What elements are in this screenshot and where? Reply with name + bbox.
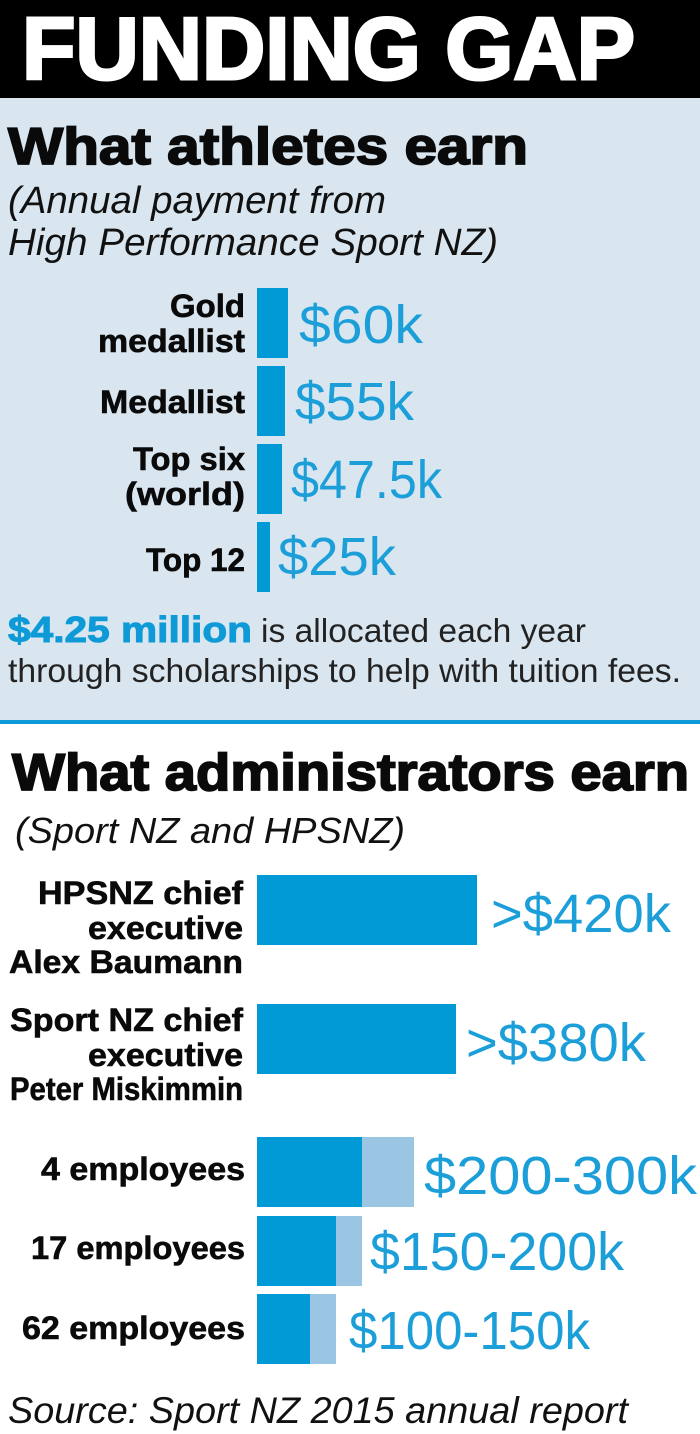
row: HPSNZ chief executive: Alex Baumann [9, 944, 243, 980]
row: top 12: Top 12 [146, 542, 245, 578]
row: 62 employees: 62 employees [22, 1310, 245, 1346]
row: 62 employees [22, 1294, 591, 1364]
row: 4 employees: 4 employees [41, 1151, 245, 1187]
row: 4 employees [41, 1137, 698, 1207]
row: gold medallist: medallist [98, 323, 245, 359]
row: HPSNZ chief executive: executive [88, 910, 243, 946]
bar chart: administrators [9, 875, 698, 1364]
text block: scholarships: $4.25 million [8, 609, 252, 650]
heading: what athletes earn: What athletes earn [8, 118, 528, 176]
row: top six: (world) [125, 476, 245, 512]
row: Sport NZ chief executive: Peter Miskimmin [10, 1071, 243, 1107]
row: gold medallist: $60k [299, 295, 424, 355]
subheading: athletes: (Annual payment from [8, 180, 386, 222]
row: gold medallist: Gold [170, 288, 245, 324]
row: Sport NZ chief executive [10, 1002, 647, 1107]
subheading: administrators: (Sport NZ and HPSNZ) [15, 810, 405, 851]
row: top six: $47.5k [291, 450, 443, 510]
row: 17 employees [31, 1216, 625, 1286]
text block: scholarships: through scholarships to help with tuition fees. [8, 653, 681, 690]
row: top six [125, 441, 443, 514]
bar chart: athletes [98, 288, 443, 592]
row: HPSNZ chief executive [9, 875, 672, 980]
row: 17 employees: 17 employees [31, 1230, 245, 1266]
row: Sport NZ chief executive: executive [88, 1037, 243, 1073]
row: top six: Top six [133, 441, 245, 477]
row: top 12: $25k [278, 527, 397, 587]
text block: scholarships: is allocated each year [261, 613, 586, 650]
row: 17 employees: $150-200k [370, 1222, 625, 1282]
row: HPSNZ chief executive: HPSNZ chief [38, 875, 243, 911]
heading: what administrators earn: What administrators earn [12, 744, 689, 802]
row: medallist: $55k [295, 372, 415, 432]
subheading: athletes [8, 180, 498, 264]
text block: scholarships [8, 609, 681, 690]
row: Sport NZ chief executive: >$380k [466, 1013, 647, 1073]
subheading: athletes: High Performance Sport NZ) [8, 222, 498, 264]
title: FUNDING GAP [22, 0, 635, 98]
row: medallist [100, 366, 415, 436]
row: gold medallist [98, 288, 424, 359]
row: Sport NZ chief executive: Sport NZ chief [10, 1002, 243, 1038]
divider band [0, 720, 700, 724]
row: top 12 [146, 522, 397, 592]
source note: Source: Sport NZ 2015 annual report [8, 1390, 630, 1431]
row: 62 employees: $100-150k [349, 1301, 591, 1361]
row: 4 employees: $200-300k [424, 1146, 698, 1206]
panel: athletes background [0, 98, 700, 720]
row: medallist: Medallist [100, 384, 245, 420]
row: HPSNZ chief executive: >$420k [491, 884, 672, 944]
